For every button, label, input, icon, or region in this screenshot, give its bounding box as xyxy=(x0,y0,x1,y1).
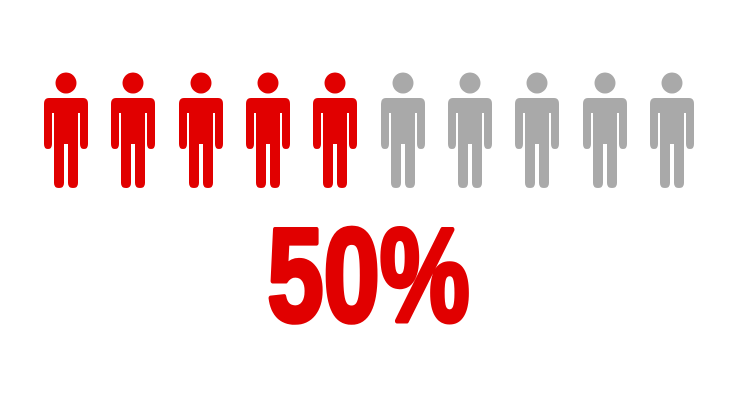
person 7 gray xyxy=(448,72,492,188)
person 4 red xyxy=(246,72,290,188)
person 1 red xyxy=(44,72,88,188)
people row xyxy=(44,72,694,188)
person 9 gray xyxy=(583,72,627,188)
person 8 gray xyxy=(515,72,559,188)
person 6 gray xyxy=(381,72,425,188)
person 5 red xyxy=(313,72,357,188)
person 3 red xyxy=(179,72,223,188)
person 2 red xyxy=(111,72,155,188)
percentage label: 50% xyxy=(267,202,470,350)
person 10 gray xyxy=(650,72,694,188)
